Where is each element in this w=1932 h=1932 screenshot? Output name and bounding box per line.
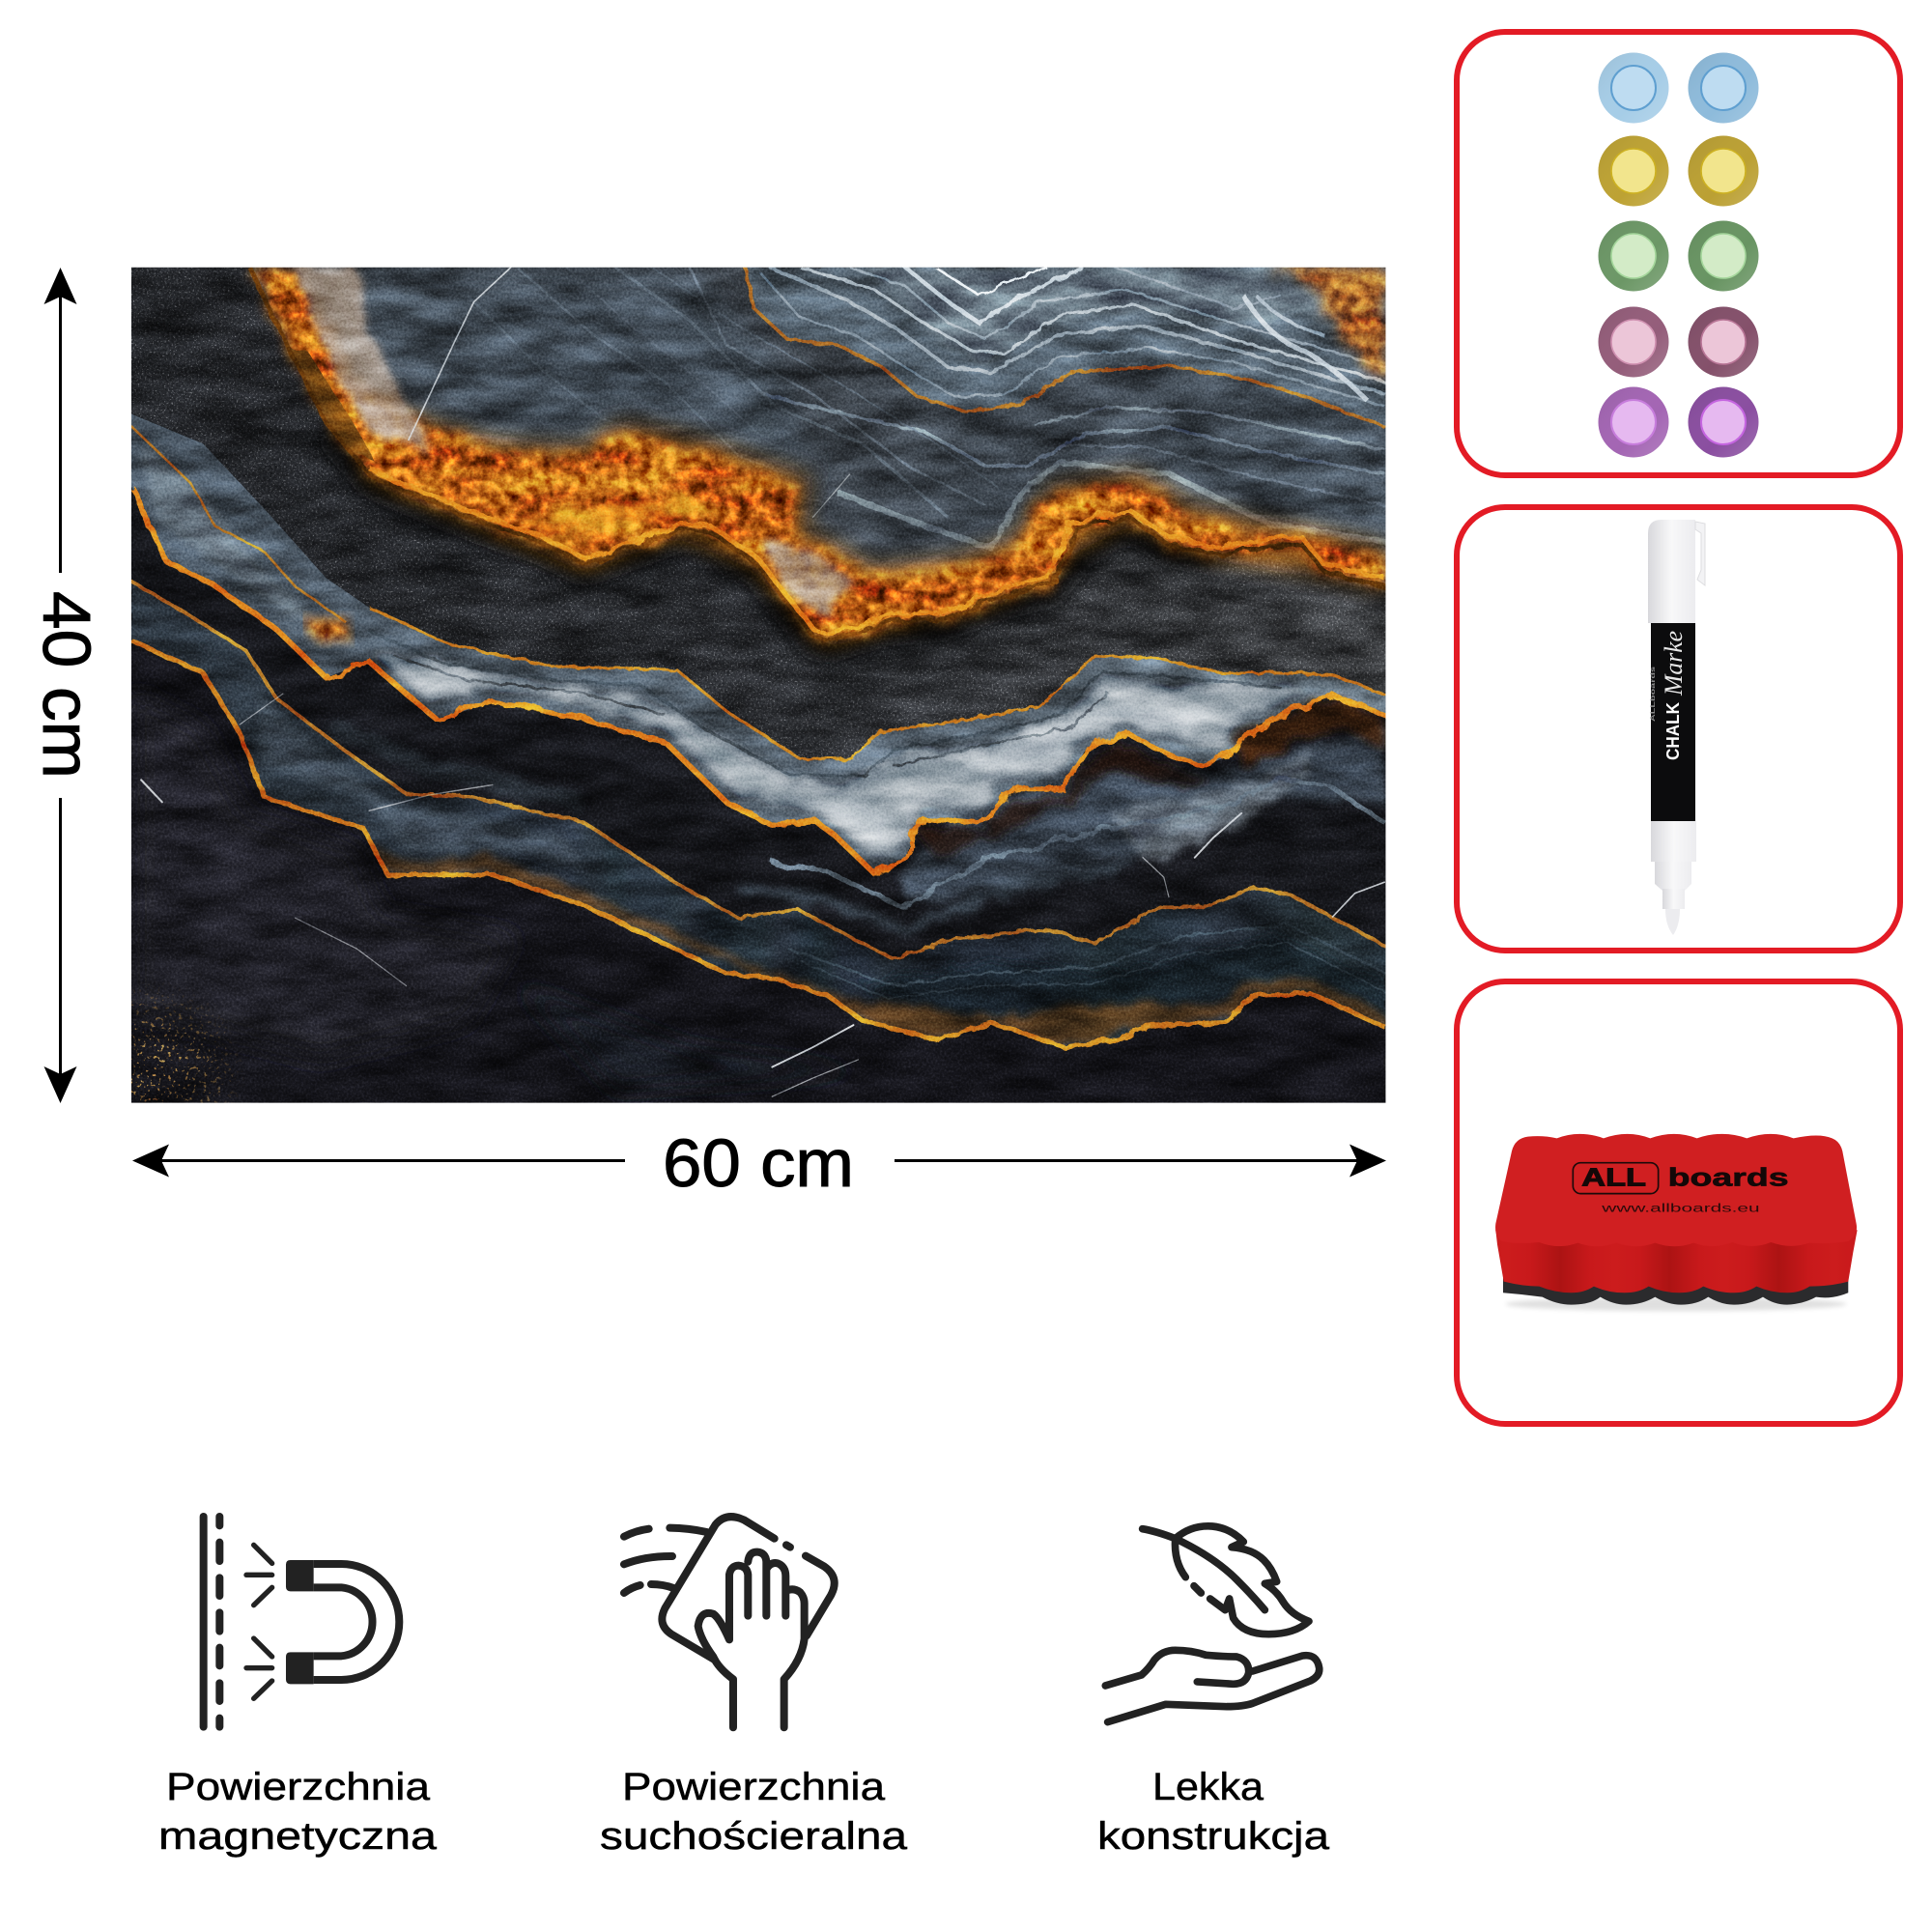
magnet yellow 2 [1689, 135, 1758, 207]
magnet pink 2 [1689, 307, 1758, 377]
marker nib [1665, 909, 1680, 935]
marker barrel labels: Marke [1660, 631, 1688, 696]
magnet purple 2 [1689, 386, 1758, 458]
icon: magnet on surface [204, 1517, 399, 1727]
magnet blue 2 [1689, 52, 1758, 124]
marker barrel labels [1651, 631, 1688, 760]
soft orange glow behind gold edge [369, 407, 1385, 640]
marker lower grip [1651, 821, 1696, 862]
marker black barrel [1651, 623, 1695, 821]
panel: chalk marker [1457, 507, 1900, 951]
label 40 cm: 40 cm [29, 591, 104, 779]
speckled texture of middle band [131, 268, 1385, 760]
width dimension arrow [132, 1125, 1386, 1201]
label: konstrukcja [1097, 1815, 1330, 1858]
eraser red top [1495, 1134, 1857, 1246]
eraser red front [1495, 1230, 1858, 1293]
arrow line right [895, 1159, 1364, 1162]
misty blue streaks in lower right band [899, 727, 1385, 905]
blue-grey band between lower veins [131, 582, 1385, 1047]
arrowhead up [44, 268, 77, 304]
label [158, 1766, 438, 1858]
marker neck [1662, 889, 1685, 909]
panel: eraser [1457, 981, 1900, 1424]
eraser black layer [1503, 1278, 1848, 1305]
magnet green 1 [1598, 220, 1669, 292]
eraser logo [1573, 1162, 1789, 1214]
marker step [1655, 862, 1691, 891]
eraser sponge [1495, 1134, 1858, 1311]
dark band below ribbon [131, 487, 1385, 958]
upper blue-grey agate bands [745, 268, 1385, 428]
label: magnetyczna [158, 1815, 438, 1858]
label [600, 1766, 908, 1858]
magnet green 2 [1689, 220, 1758, 292]
arrowhead down [44, 1066, 77, 1103]
magnet yellow 1 [1598, 135, 1669, 207]
label 60 cm: 60 cm [663, 1125, 854, 1201]
magnet blue 1 [1598, 52, 1669, 124]
label: suchościeralna [600, 1815, 908, 1858]
black lower zone [131, 640, 1385, 1103]
panel: magnets [1457, 32, 1900, 475]
marble board image [131, 268, 1385, 1103]
magnet purple 1 [1598, 386, 1669, 458]
marker cap [1648, 520, 1695, 623]
pale beige translucent mineral areas [296, 268, 425, 450]
feature: magnetic surface [158, 1517, 438, 1858]
icon: hand wiping [624, 1517, 835, 1727]
eraser logo: www.allboards.eu [1601, 1201, 1760, 1214]
marker barrel labels: ALLboards [1651, 666, 1657, 722]
thin gold vein upper right [745, 268, 1385, 428]
feature: lightweight construction [1097, 1526, 1330, 1858]
copper glow above lower vein [369, 848, 1385, 1047]
label: Powierzchnia [622, 1766, 886, 1808]
thin gold veins lower [131, 582, 1385, 1047]
feature: dry-erase surface [600, 1517, 908, 1858]
label: Lekka [1152, 1766, 1264, 1808]
marker clip [1695, 522, 1705, 585]
blue-white ribbon [131, 414, 1385, 872]
bright gold contour of ribbon [131, 487, 1385, 872]
eraser logo: boards [1668, 1162, 1789, 1191]
white cracks [141, 268, 1384, 1096]
copper speckle lower left [131, 961, 279, 1103]
icon: feather over hand [1105, 1526, 1320, 1722]
arrowhead right [1350, 1144, 1386, 1177]
arrow line top [59, 290, 62, 573]
large glowing gold edge [252, 268, 1385, 640]
marker barrel labels: CHALK [1663, 702, 1683, 760]
arrow line left [155, 1159, 625, 1162]
arrowhead left [132, 1144, 169, 1177]
height dimension arrow [29, 268, 104, 1103]
eraser shadow [1505, 1297, 1847, 1311]
top right gold corner [1275, 268, 1385, 382]
magnet pink 1 [1598, 307, 1669, 377]
label [1097, 1766, 1330, 1858]
arrow line bottom [59, 798, 62, 1080]
eraser logo: ALL [1581, 1162, 1646, 1191]
label: Powierzchnia [166, 1766, 431, 1808]
